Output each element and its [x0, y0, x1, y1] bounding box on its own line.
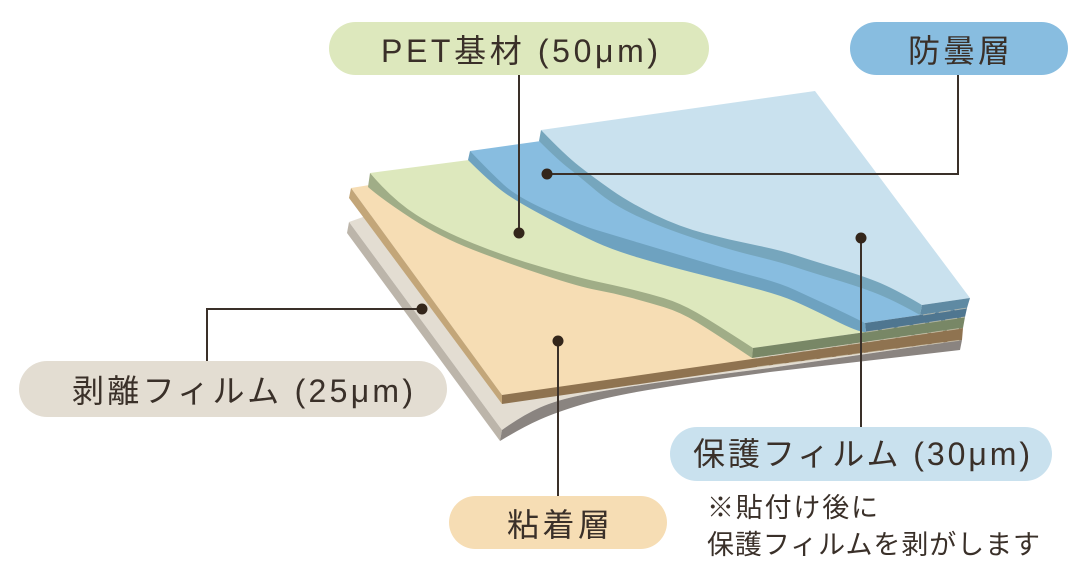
leader line: protective film	[856, 232, 866, 428]
label: adhesive layer	[449, 496, 667, 549]
note	[707, 493, 1040, 560]
label: PET base	[329, 22, 709, 75]
label: anti-fog layer	[850, 22, 1068, 75]
label: PET base: PET基材 (50μm)	[381, 33, 658, 69]
label: protective film: 保護フィルム (30μm)	[693, 436, 1030, 472]
label: anti-fog layer: 防曇層	[908, 33, 1010, 69]
layer: anti-fog	[468, 141, 967, 332]
layer: adhesive	[349, 180, 963, 404]
layer: release film	[347, 205, 962, 441]
note: 保護フィルムを剥がします	[707, 530, 1040, 560]
label: release film	[19, 361, 447, 417]
label: release film: 剥離フィルム (25μm)	[72, 373, 413, 409]
layer: PET base	[368, 160, 965, 358]
leader line: adhesive	[552, 336, 564, 496]
layer stack diagram	[347, 91, 970, 441]
leader line: release film	[207, 304, 428, 361]
note: ※貼付け後に	[707, 493, 878, 523]
label: adhesive layer: 粘着層	[507, 507, 610, 543]
leader line: PET base	[514, 75, 524, 238]
layer: protective film	[539, 91, 970, 315]
label: protective film	[670, 427, 1052, 481]
leader line: anti-fog	[542, 75, 958, 180]
